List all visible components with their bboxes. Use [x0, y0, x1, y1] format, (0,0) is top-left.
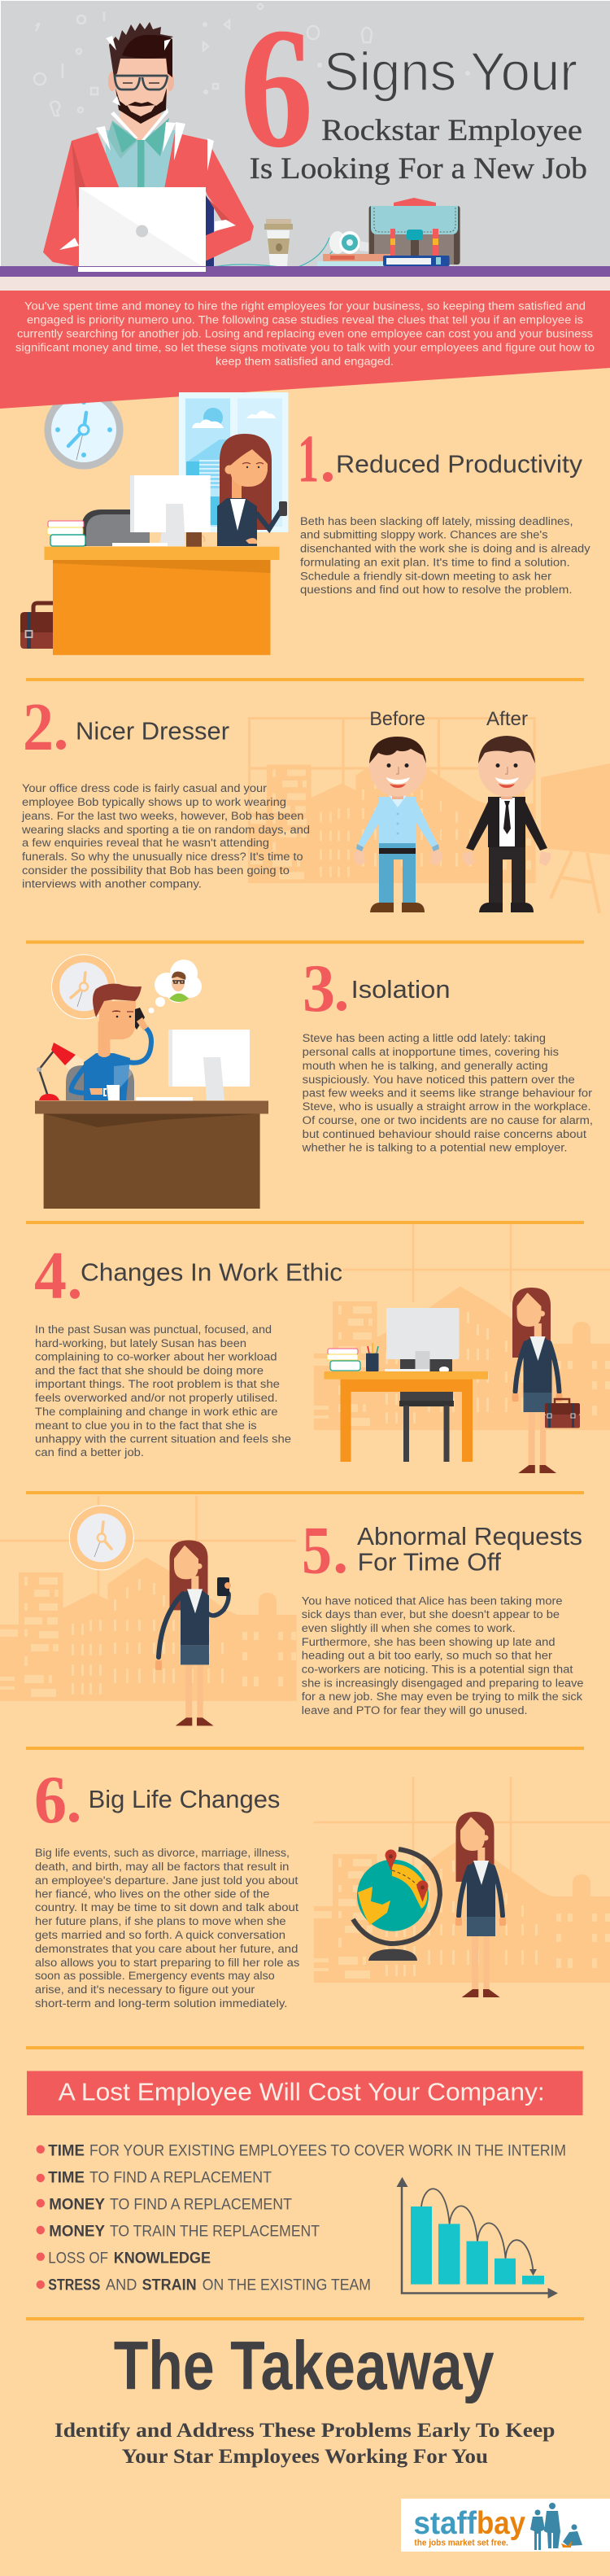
figure: man before: [354, 737, 442, 912]
laptop: [79, 187, 206, 267]
divider: [26, 1747, 584, 1750]
heading: sign 3: [303, 951, 451, 1026]
cost item 1: FOR YOUR EXISTING EMPLOYEES TO COVER WORK IN THE INTERIM: [89, 2141, 566, 2159]
heading: the takeaway: The Takeaway: [114, 2328, 495, 2404]
illustration: Beth at desk: [44, 434, 287, 655]
intro text: keep them satisfied and engaged.: [216, 355, 394, 368]
heading: sign 2: [23, 689, 229, 765]
cost item 2: TO FIND A REPLACEMENT: [89, 2168, 272, 2186]
text: sign 1: disenchanted with the work she is doing and is already: [300, 543, 591, 556]
text: sign 6: death, and birth, may all be factors that result in: [35, 1861, 289, 1874]
text: sign 1: Schedule a friendly sit-down meeting to ask her: [300, 570, 551, 583]
header panel: [0, 0, 610, 269]
text: sign 5: heading out a bit too early, so much so that her: [302, 1650, 552, 1663]
intro text: You've spent time and money to hire the right employees for your business, so keeping them satisfied and: [24, 300, 586, 313]
books: [328, 1349, 358, 1354]
heading: sign 2: 2: [23, 689, 54, 765]
illustration: briefcase: [20, 603, 53, 649]
heading: sign 4: 4: [34, 1238, 67, 1314]
takeaway message: [54, 2418, 556, 2468]
list: costs: [37, 2141, 566, 2294]
cost item 6: AND: [106, 2276, 137, 2294]
cost banner: [27, 2071, 582, 2115]
pen cup: [366, 1354, 379, 1371]
hair: [109, 22, 173, 77]
cost item 5: LOSS OF: [48, 2249, 108, 2267]
heading: sign 6: 6: [34, 1762, 67, 1838]
clock: section 1: [44, 391, 124, 469]
background: window and city, sign 4: [314, 1224, 610, 1430]
text: sign 3: mouth when he is talking, and generally acting: [303, 1060, 548, 1073]
text: sign 1: [300, 515, 591, 597]
divider: [26, 941, 584, 944]
divider: [26, 1221, 584, 1224]
label: before: Before: [369, 708, 425, 730]
text: sign 6: short-term and long-term solution immediately.: [35, 1997, 288, 2010]
text: sign 4: meant to clue you in to the fact that she is: [35, 1419, 257, 1432]
text: sign 5: for a new job. She may even be trying to milk the sick: [302, 1690, 583, 1703]
text: sign 4: can find a better job.: [35, 1446, 144, 1459]
illustration: books: [317, 254, 450, 266]
background: window and city, sign 2: [248, 718, 610, 913]
cost item 6: STRAIN: [142, 2276, 197, 2294]
cost item 4: [37, 2223, 320, 2241]
cost banner: A Lost Employee Will Cost Your Company:: [59, 2078, 545, 2106]
text: sign 5: she is increasingly disengaged and preparing to leave: [302, 1677, 584, 1690]
divider: [26, 2317, 584, 2320]
bag: [545, 1399, 580, 1428]
divider: [26, 678, 584, 681]
text: sign 6: soon as possible. Emergency events may also: [35, 1970, 275, 1983]
text: sign 6: also allows you to start preparing to fill her role as: [35, 1957, 299, 1970]
text: sign 1: Beth has been slacking off lately, missing deadlines,: [300, 515, 573, 528]
illustration: office window: [179, 392, 288, 532]
red intro banner: [0, 291, 610, 409]
logo: staffbay: [401, 2499, 610, 2552]
navy lining: [72, 195, 214, 267]
logo people: [530, 2503, 582, 2550]
text: sign 6: arise, and it's necessary to figure out your: [35, 1983, 255, 1997]
coffee mug: [186, 532, 202, 547]
cost item 6: STRESS: [48, 2276, 100, 2294]
heading: sign 5: 5: [302, 1513, 332, 1589]
divider: [26, 1491, 584, 1494]
figure: Susan with briefcase: [512, 1288, 580, 1473]
heading: sign 1: 1: [298, 422, 319, 496]
text: sign 4: complaining to co-worker about her workload: [35, 1351, 277, 1364]
text: sign 4: In the past Susan was punctual, focused, and: [35, 1323, 272, 1336]
illustration: globe: [353, 1849, 440, 1961]
thought bubble: [148, 960, 202, 1013]
desk surface band: [0, 266, 610, 277]
figure: Alice with phone: [155, 1540, 231, 1725]
illustration: Steve on phone at desk: [35, 984, 268, 1209]
title: Signs Your: [324, 42, 577, 103]
intro text: [15, 300, 595, 368]
text: sign 3: Steve, who is usually a straight arrow in the workplace.: [303, 1100, 591, 1113]
heading: sign 6: [34, 1762, 280, 1838]
phone: [135, 1008, 145, 1030]
lamp: [37, 1043, 106, 1100]
heading: sign 1: Reduced Productivity: [336, 450, 583, 479]
desk: [324, 1371, 488, 1380]
text: sign 4: [35, 1323, 291, 1459]
clock: section 3: [52, 955, 115, 1019]
text: sign 5: leave and PTO for fear they will go unused.: [302, 1704, 528, 1717]
cost item 5: KNOWLEDGE: [114, 2249, 211, 2267]
text: sign 3: personal calls at inopportune times, covering his: [303, 1046, 559, 1059]
title: Is Looking For a New Job: [250, 152, 587, 186]
desk body: [53, 560, 270, 655]
heading: sign 5: Abnormal Requests: [357, 1522, 582, 1550]
text: sign 6: an employee's departure. Jane just told you about: [35, 1874, 298, 1887]
text: sign 4: and the fact that she should be doing more: [35, 1365, 264, 1378]
text: sign 4: The complaining and change in work ethic are: [35, 1406, 278, 1419]
text: sign 6: her fiancé, who lives on the other side of the: [35, 1888, 270, 1901]
neck: [120, 106, 161, 140]
text: sign 5: co-workers are noticing. This is a potential sign that: [302, 1664, 573, 1677]
text: sign 6: country. It may be time to sit down and talk about: [35, 1901, 298, 1914]
books: [47, 521, 85, 546]
face: [115, 59, 168, 124]
text: sign 4: feels overworked and/or not properly utilised.: [35, 1392, 278, 1405]
intro text: engaged is priority numero uno. The following case studies reveal the clues that tell you if an employee is: [27, 314, 583, 327]
neck and head: [98, 1021, 110, 1057]
illustration: satchel: [369, 198, 460, 265]
text: sign 2: a few enquiries reveal that he wasn't attending: [22, 837, 269, 850]
shirt: [106, 130, 179, 189]
heading: sign 5: For Time Off: [358, 1548, 501, 1577]
text: sign 6: gets married and so forth. A quick conversation: [35, 1929, 285, 1942]
cost item 4: MONEY: [49, 2223, 105, 2241]
text: sign 5: You have noticed that Alice has been taking more: [302, 1594, 563, 1607]
takeaway message: Identify and Address These Problems Early To Keep: [54, 2418, 556, 2442]
cost item 3: [37, 2196, 292, 2214]
text: sign 4: unhappy with the current situation and feels she: [35, 1433, 291, 1446]
desk: [35, 1100, 268, 1113]
heading: sign 3: 3: [303, 951, 335, 1026]
intro text: currently searching for another job. Losing and replacing even one employee can cost you and your business: [17, 328, 593, 341]
text: sign 6: Big life events, such as divorce, marriage, illness,: [35, 1847, 290, 1860]
text: sign 3: suspiciously. You have noticed this pattern over the: [303, 1074, 575, 1087]
header light strip: [0, 277, 610, 291]
torso: [84, 1053, 130, 1100]
intro text: significant money and time, so let these signs motivate you to talk with your employees and figure out how to: [15, 342, 595, 355]
heading: sign 5: [302, 1513, 582, 1589]
mug and hand: [107, 1085, 120, 1100]
background: window and city, sign 6: [314, 1777, 610, 1983]
text: sign 6: [35, 1847, 299, 2010]
cost item 3: MONEY: [49, 2196, 105, 2214]
logo: staffbay: staff: [413, 2506, 477, 2541]
figure: man after: [463, 736, 551, 912]
text: sign 3: whether he is talking to a potential new employer.: [302, 1141, 568, 1154]
text: sign 3: but continued behaviour should raise concerns about: [303, 1128, 586, 1141]
chair: [66, 1065, 134, 1100]
text: sign 2: [21, 782, 310, 891]
illustration: headphones: [207, 231, 390, 269]
text: sign 1: and submitting sloppy work. Chances are she's: [300, 529, 548, 542]
heading: sign 6: Big Life Changes: [89, 1785, 280, 1813]
monitor: [133, 475, 211, 532]
text: sign 4: important things. The root problem is that she: [35, 1378, 280, 1391]
text: sign 5: Furthermore, she has been showing up late and: [302, 1636, 555, 1649]
doodles: [34, 4, 372, 116]
logo: staffbay: bay: [477, 2506, 525, 2541]
cost item 4: TO TRAIN THE REPLACEMENT: [110, 2223, 320, 2241]
heading: sign 2: Nicer Dresser: [76, 716, 229, 746]
text: sign 2: Your office dress code is fairly casual and your: [22, 782, 267, 795]
heading: sign 4: Changes In Work Ethic: [81, 1258, 342, 1287]
text: sign 3: Of course, one or two incidents are no cause for alarm,: [303, 1114, 593, 1127]
title: Rockstar Employee: [321, 114, 582, 147]
text: sign 2: wearing slacks and sporting a tie on random days, and: [21, 824, 310, 837]
clock: section 5: [69, 1506, 133, 1570]
text: sign 2: consider the possibility that Bob has been going to: [22, 864, 290, 877]
text: sign 5: even slightly ill when she comes to work.: [302, 1622, 516, 1635]
jacket: [43, 133, 120, 267]
text: sign 4: hard-working, but lately Susan has been: [35, 1337, 246, 1350]
desk top: [44, 547, 280, 560]
text: sign 1: questions and find out how to resolve the problem.: [300, 584, 573, 597]
cost item 3: TO FIND A REPLACEMENT: [110, 2196, 292, 2214]
text: sign 6: her future plans, if she plans to move when she: [35, 1915, 286, 1928]
cost item 5: [37, 2249, 211, 2267]
text: sign 2: employee Bob typically shows up to work wearing: [22, 796, 286, 809]
illustration: coffee cup: [264, 219, 293, 266]
text: sign 6: demonstrates that you care about her future, and: [35, 1943, 298, 1956]
text: sign 2: funerals. So why the unusually nice dress? It's time to: [22, 851, 303, 864]
text: sign 3: [302, 1032, 593, 1154]
cost item 6: ON THE EXISTING TEAM: [203, 2276, 371, 2294]
text: sign 1: formulating an exit plan. It's time to find a solution.: [300, 557, 570, 570]
heading: sign 1: [298, 422, 583, 496]
text: sign 2: jeans. For the last two weeks, however, Bob has been: [21, 810, 304, 823]
laptop base: [78, 267, 206, 272]
figure: Jane: [455, 1812, 506, 1997]
heading: sign 4: [34, 1238, 342, 1314]
takeaway message: Your Star Employees Working For You: [122, 2444, 488, 2468]
logo: staffbay: the jobs market set free.: [414, 2539, 508, 2548]
text: sign 3: past few weeks and it seems like strange behaviour for: [303, 1087, 592, 1100]
cost item 1: TIME: [48, 2141, 85, 2159]
monitor: [169, 1030, 250, 1087]
title: [240, 0, 587, 186]
label: after: After: [486, 708, 528, 730]
text: sign 5: [302, 1594, 584, 1717]
text: sign 2: interviews with another company.: [22, 878, 202, 891]
beard: [115, 88, 167, 124]
cost item 2: TIME: [48, 2168, 85, 2186]
gray office chair: [81, 510, 150, 546]
heading: sign 3: Isolation: [351, 975, 451, 1004]
illustration: empty desk: [324, 1308, 488, 1462]
lapels: [59, 108, 236, 250]
divider: [26, 2046, 584, 2049]
background: window and city, sign 5: [0, 1496, 297, 1701]
ears: [108, 72, 116, 91]
woman on phone: [220, 434, 272, 530]
glasses: [114, 76, 168, 90]
cost item 6: [37, 2276, 371, 2294]
text: sign 3: Steve has been acting a little odd lately: taking: [303, 1032, 546, 1045]
illustration: man with laptop: [43, 22, 254, 267]
text: sign 5: sick days than ever, but she doesn't appear to be: [302, 1608, 560, 1621]
chart: falling bars: [397, 2177, 558, 2298]
stool: [400, 1392, 453, 1403]
